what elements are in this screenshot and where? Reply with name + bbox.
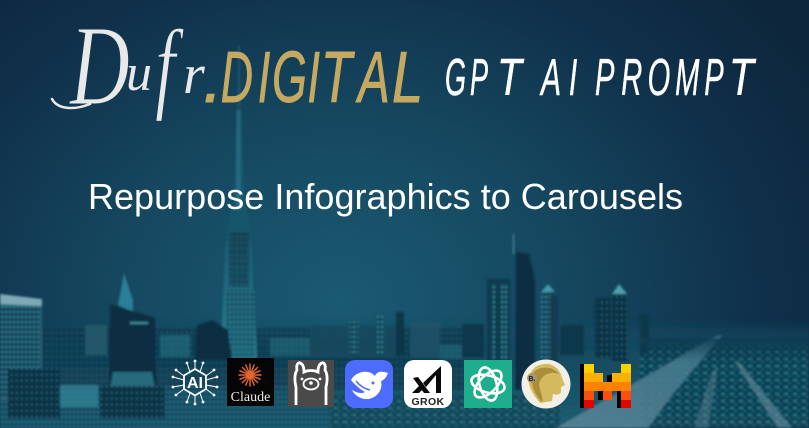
heading: GPT AI PROMPT: T [497, 48, 525, 106]
icon row: AI tools [172, 358, 631, 408]
icon: golden bust portrait [522, 360, 570, 408]
icon: Mistral pixel M [580, 364, 631, 408]
heading: GPT AI PROMPT [445, 47, 757, 107]
icon: Grok: GROK [411, 396, 445, 408]
heading: GPT AI PROMPT: T [729, 48, 757, 106]
icon: ChatGPT [464, 360, 512, 408]
highway [556, 335, 792, 428]
logo accent: .DIGITAL: A [355, 37, 390, 117]
logo: Dufr.DIGITAL wordmark [52, 2, 423, 129]
horizon haze [640, 338, 809, 362]
logo accent: .DIGITAL: L [392, 37, 423, 118]
logo accent: .DIGITAL: . [203, 38, 223, 118]
heading: GPT AI PROMPT: PROMP [595, 48, 724, 106]
right side towers [310, 234, 649, 390]
icon: Ollama llama [288, 360, 334, 407]
icon: AI circuit badge [172, 360, 218, 405]
logo script: Dufr: r [183, 44, 205, 106]
icon: Claude: Claude [231, 390, 270, 405]
heading: GPT AI PROMPT: AI [539, 50, 577, 107]
ground and far city band [0, 318, 809, 428]
logo script: Dufr: D [68, 2, 130, 129]
icon: DeepSeek whale [345, 360, 393, 408]
logo accent: .DIGITAL: T [321, 38, 355, 118]
title: Repurpose Infographics to Carousels: Repurpose Infographics to Carousels [88, 176, 683, 217]
icon: golden bust portrait: B. [528, 376, 536, 383]
skyscraper: Burj Khalifa [220, 45, 257, 358]
heading: GPT AI PROMPT: GP [445, 47, 488, 106]
left side towers [0, 273, 232, 418]
logo accent: .DIGITAL: DIGI [221, 37, 320, 118]
logo script: Dufr: f [155, 10, 184, 123]
icon: Grok [404, 360, 452, 408]
icon: AI circuit badge: AI [187, 375, 203, 392]
logo script: Dufr [52, 2, 205, 129]
logo script: Dufr: u [126, 45, 152, 102]
logo accent: .DIGITAL [203, 37, 423, 118]
icon: Claude [227, 358, 274, 406]
